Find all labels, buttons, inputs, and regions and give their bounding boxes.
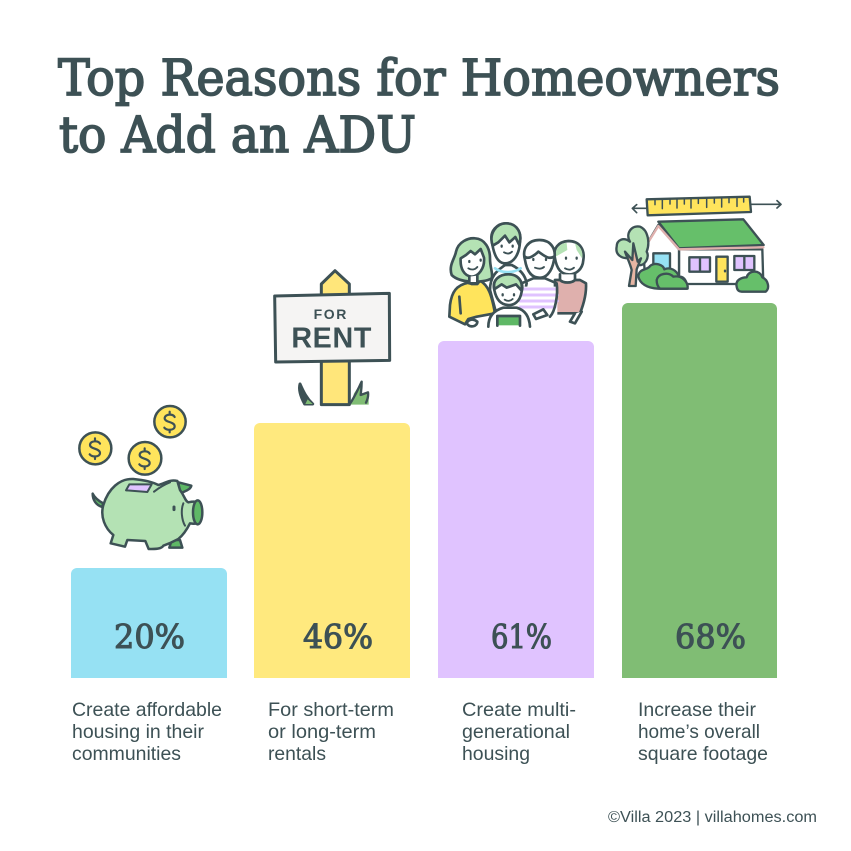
label: affordable housing: housing in their xyxy=(72,721,204,743)
icon: for rent sign: RENT xyxy=(291,322,372,354)
label: rentals: For short-term xyxy=(268,699,394,721)
label: affordable housing xyxy=(72,699,222,765)
bar: 61% xyxy=(438,341,594,678)
label: square footage: square footage xyxy=(638,743,768,765)
label: affordable housing: communities xyxy=(72,743,181,765)
title: Top Reasons for Homeowners xyxy=(58,49,780,107)
bar: 20% xyxy=(71,568,227,678)
label: rentals xyxy=(268,699,394,765)
bar: 61%: 61% xyxy=(491,617,552,656)
icon: for rent sign xyxy=(275,271,390,405)
bar: 68% xyxy=(622,303,777,678)
title: to Add an ADU xyxy=(59,106,416,164)
label: affordable housing: Create affordable xyxy=(72,699,222,721)
icon: house with ruler xyxy=(616,197,781,292)
label: square footage: home’s overall xyxy=(638,721,760,743)
label: multi-generational: Create multi- xyxy=(462,699,576,721)
label: rentals: or long-term xyxy=(268,721,376,743)
label: multi-generational: housing xyxy=(462,743,530,765)
credit: ©Villa 2023 | villahomes.com xyxy=(608,809,817,826)
icon: multigenerational family xyxy=(449,223,586,327)
bar: 20%: 20% xyxy=(114,617,185,656)
label: square footage: Increase their xyxy=(638,699,756,721)
bar: 68%: 68% xyxy=(675,617,746,656)
label: square footage xyxy=(638,699,768,765)
icon: for rent sign: FOR xyxy=(314,306,346,322)
title xyxy=(58,49,780,164)
icon: piggy bank with coins xyxy=(79,406,202,549)
bar: 46% xyxy=(254,423,410,678)
label: rentals: rentals xyxy=(268,743,326,765)
label: multi-generational xyxy=(462,699,576,765)
label: multi-generational: generational xyxy=(462,721,570,743)
bar: 46%: 46% xyxy=(303,617,373,656)
